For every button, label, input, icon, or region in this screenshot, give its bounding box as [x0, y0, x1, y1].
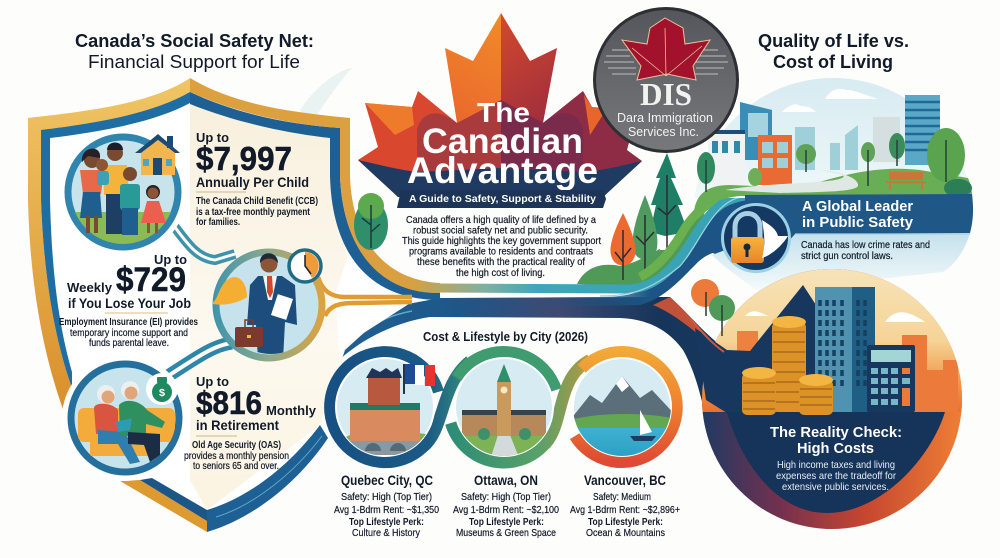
shield blue frame right — [190, 92, 440, 300]
left tree — [354, 193, 388, 250]
man — [247, 276, 297, 360]
family illustration — [64, 134, 182, 250]
benefit: employment insurance: funds parental leave. — [89, 338, 169, 349]
shield bottom blue left — [140, 478, 207, 521]
safety text — [801, 198, 930, 262]
red band accent — [690, 318, 724, 352]
faint background swoosh — [300, 68, 352, 125]
leaf centre left shade — [417, 100, 501, 172]
bench — [886, 172, 926, 190]
subtitle ribbon: A Guide to Safety, Support & Stability — [409, 193, 596, 205]
city details: Culture & History — [352, 527, 421, 539]
swoosh top stripe — [440, 196, 745, 289]
trees — [697, 128, 972, 197]
ground — [694, 169, 972, 216]
benefit: old age security: Up to — [196, 374, 229, 389]
heading: social safety net — [75, 31, 314, 72]
heading: city comparison: Cost & Lifestyle by City (2026) — [423, 330, 588, 344]
safety text: strict gun control laws. — [801, 250, 893, 262]
boy — [120, 167, 140, 235]
benefit: child benefit: The Canada Child Benefit (CCB) — [196, 196, 318, 207]
benefit: old age security: Old Age Security (OAS) — [192, 440, 281, 451]
intro paragraph: programs available to residents and contraats — [409, 246, 593, 258]
icon: clock — [289, 250, 321, 282]
safety text: in Public Safety — [802, 214, 914, 231]
icon: briefcase — [235, 320, 263, 347]
clouds — [782, 89, 878, 112]
green stripe on rising swoosh — [640, 192, 745, 277]
shield — [28, 78, 440, 532]
cost text — [770, 425, 902, 493]
heading: social safety net: Canada’s Social Safety Net: — [75, 31, 314, 51]
benefit: employment insurance: if You Lose Your Job — [68, 295, 191, 311]
benefit: employment insurance: Employment Insurance (EI) provides — [59, 317, 198, 328]
building — [815, 287, 875, 412]
centre right trees — [577, 153, 705, 288]
shield blue frame left — [41, 92, 190, 388]
leaf navy base — [358, 160, 642, 197]
subtitle ribbon — [397, 190, 606, 208]
cost text: High Costs — [797, 441, 874, 457]
lower light area — [712, 233, 970, 292]
red wedge on lower band — [653, 297, 722, 351]
city details — [453, 473, 559, 539]
sky dome — [690, 78, 980, 198]
city details: Museums & Green Space — [456, 527, 556, 539]
orange building — [758, 135, 792, 185]
heading: quality of life: Cost of Living — [773, 52, 893, 72]
city details: Vancouver, BC — [584, 473, 666, 488]
city: Ottawa — [453, 358, 559, 539]
city details: Avg 1-Bdrm Rent: ~$2,896+ — [570, 504, 680, 516]
city details — [570, 473, 680, 539]
logo wordmark: Dara Immigration — [617, 110, 713, 125]
white building — [708, 130, 745, 185]
mother with baby — [80, 149, 109, 233]
logo — [593, 7, 739, 153]
benefit: old age security: Monthly — [266, 403, 317, 418]
shield bottom right blue — [207, 425, 328, 532]
sailboat — [630, 410, 656, 441]
title: The — [477, 97, 530, 128]
city details: Safety: High (Top Tier) — [341, 491, 432, 503]
band over cost circle — [695, 285, 816, 413]
intro paragraph: the high cost of living. — [456, 267, 545, 279]
main swoosh band — [337, 297, 828, 529]
benefit: child benefit — [196, 130, 318, 228]
city details: Safety: High (Top Tier) — [461, 491, 551, 503]
lock badge — [721, 203, 791, 273]
employment illustration — [213, 250, 322, 360]
blue tall building — [740, 102, 772, 160]
benefit: old age security: to seniors 65 and over. — [193, 461, 279, 472]
shield right half cream — [190, 90, 400, 510]
gold branch connectors — [318, 277, 412, 316]
logo leaf — [622, 18, 710, 80]
icon: house — [135, 134, 180, 175]
icon: money bag: $ — [159, 388, 165, 399]
intro paragraph: robust social safety net and public security. — [413, 224, 588, 236]
city details: Ottawa, ON — [474, 473, 538, 488]
city: Vancouver — [570, 358, 680, 539]
cost text: The Reality Check: — [770, 425, 902, 441]
icon: coin stacks — [742, 316, 833, 415]
city: Quebec — [334, 358, 439, 539]
city details: Top Lifestyle Perk: — [349, 516, 424, 528]
small trees — [691, 279, 735, 336]
upper band rising to safety panel — [540, 194, 800, 307]
safety text: A Global Leader — [802, 198, 913, 215]
pale tower — [873, 117, 900, 162]
city details: Quebec City, QC — [341, 473, 433, 488]
flag — [403, 364, 435, 394]
benefit: old age security: $816 — [196, 385, 262, 421]
cost text: expenses are the tradeoff for — [776, 470, 896, 482]
benefit: old age security: in Retirement — [196, 417, 279, 433]
logo lines — [604, 50, 728, 74]
dark band — [745, 194, 973, 262]
city details: Top Lifestyle Perk: — [588, 516, 663, 528]
benefit: employment insurance: Up to — [154, 252, 187, 267]
girl — [141, 185, 166, 233]
white cut-out beside swoosh — [335, 235, 415, 360]
title — [407, 97, 598, 191]
shield gold frame top right — [190, 78, 440, 293]
benefit: child benefit: Annually Per Child — [196, 174, 309, 190]
panel: high costs — [690, 268, 965, 529]
grandfather — [119, 381, 165, 462]
shield bottom gold — [120, 480, 207, 532]
city details: Safety: Medium — [593, 491, 651, 503]
blue tower — [905, 95, 940, 165]
benefit: employment insurance: Weekly — [67, 280, 113, 295]
man's head — [260, 253, 278, 272]
city details: Avg 1-Bdrm Rent: ~$2,100 — [453, 504, 559, 516]
benefit: child benefit: for families. — [196, 217, 240, 228]
title: Canadian — [422, 122, 583, 161]
swoosh tip highlight — [345, 311, 412, 348]
logo leaf veins — [632, 28, 702, 76]
heading: quality of life — [758, 31, 909, 72]
leaf centre right shade — [501, 100, 583, 172]
logo wordmark: Services Inc. — [628, 124, 699, 139]
cost text: extensive public services. — [782, 481, 889, 493]
city details: Avg 1-Bdrm Rent: ~$1,350 — [334, 504, 439, 516]
heading: quality of life: Quality of Life vs. — [758, 31, 909, 51]
benefit: child benefit: $7,997 — [196, 140, 292, 177]
book — [116, 418, 132, 432]
band light underline — [795, 233, 970, 235]
road — [725, 170, 858, 193]
title: Advantage — [407, 150, 598, 191]
shield gold frame top left and side — [28, 78, 190, 412]
benefit: employment insurance — [59, 252, 198, 349]
intro paragraph: This guide highlights the key government support — [402, 235, 601, 247]
intro paragraph — [402, 214, 601, 279]
city details: Top Lifestyle Perk: — [469, 516, 544, 528]
shield interior — [28, 78, 350, 532]
seniors illustration — [62, 355, 188, 481]
father — [103, 142, 129, 234]
city rings — [330, 352, 677, 462]
intro paragraph: these benefits with the practical reality of — [417, 256, 585, 268]
benefit: child benefit: is a tax-free monthly payment — [196, 207, 311, 218]
benefit: old age security: provides a monthly pension — [184, 451, 289, 462]
intro paragraph: Canada offers a high quality of life defined by a — [406, 214, 596, 226]
benefit: employment insurance: $729 — [116, 261, 186, 299]
grandmother — [94, 385, 140, 464]
city details: Ocean & Mountains — [586, 527, 665, 539]
tube connectors — [165, 218, 235, 378]
icon: hard hat — [213, 277, 247, 305]
maple leaf title emblem — [358, 13, 642, 197]
benefit: old age security — [184, 374, 317, 472]
logo wordmark — [617, 76, 713, 139]
icon: calculator — [867, 345, 915, 412]
benefit: child benefit: Up to — [196, 130, 229, 145]
city scene — [690, 78, 980, 216]
cost text: High income taxes and living — [777, 459, 895, 471]
swoosh light edge — [600, 195, 760, 296]
navy base — [727, 412, 945, 513]
panel: public safety — [690, 78, 980, 292]
city details — [334, 473, 439, 539]
benefit: employment insurance: temporary income support and — [70, 328, 188, 339]
logo wordmark: DIS — [640, 76, 692, 112]
distant buildings — [795, 125, 858, 170]
heading: social safety net: Financial Support for Life — [88, 52, 300, 72]
safety text: Canada has low crime rates and — [801, 239, 930, 251]
shield bottom right highlight — [216, 436, 322, 517]
